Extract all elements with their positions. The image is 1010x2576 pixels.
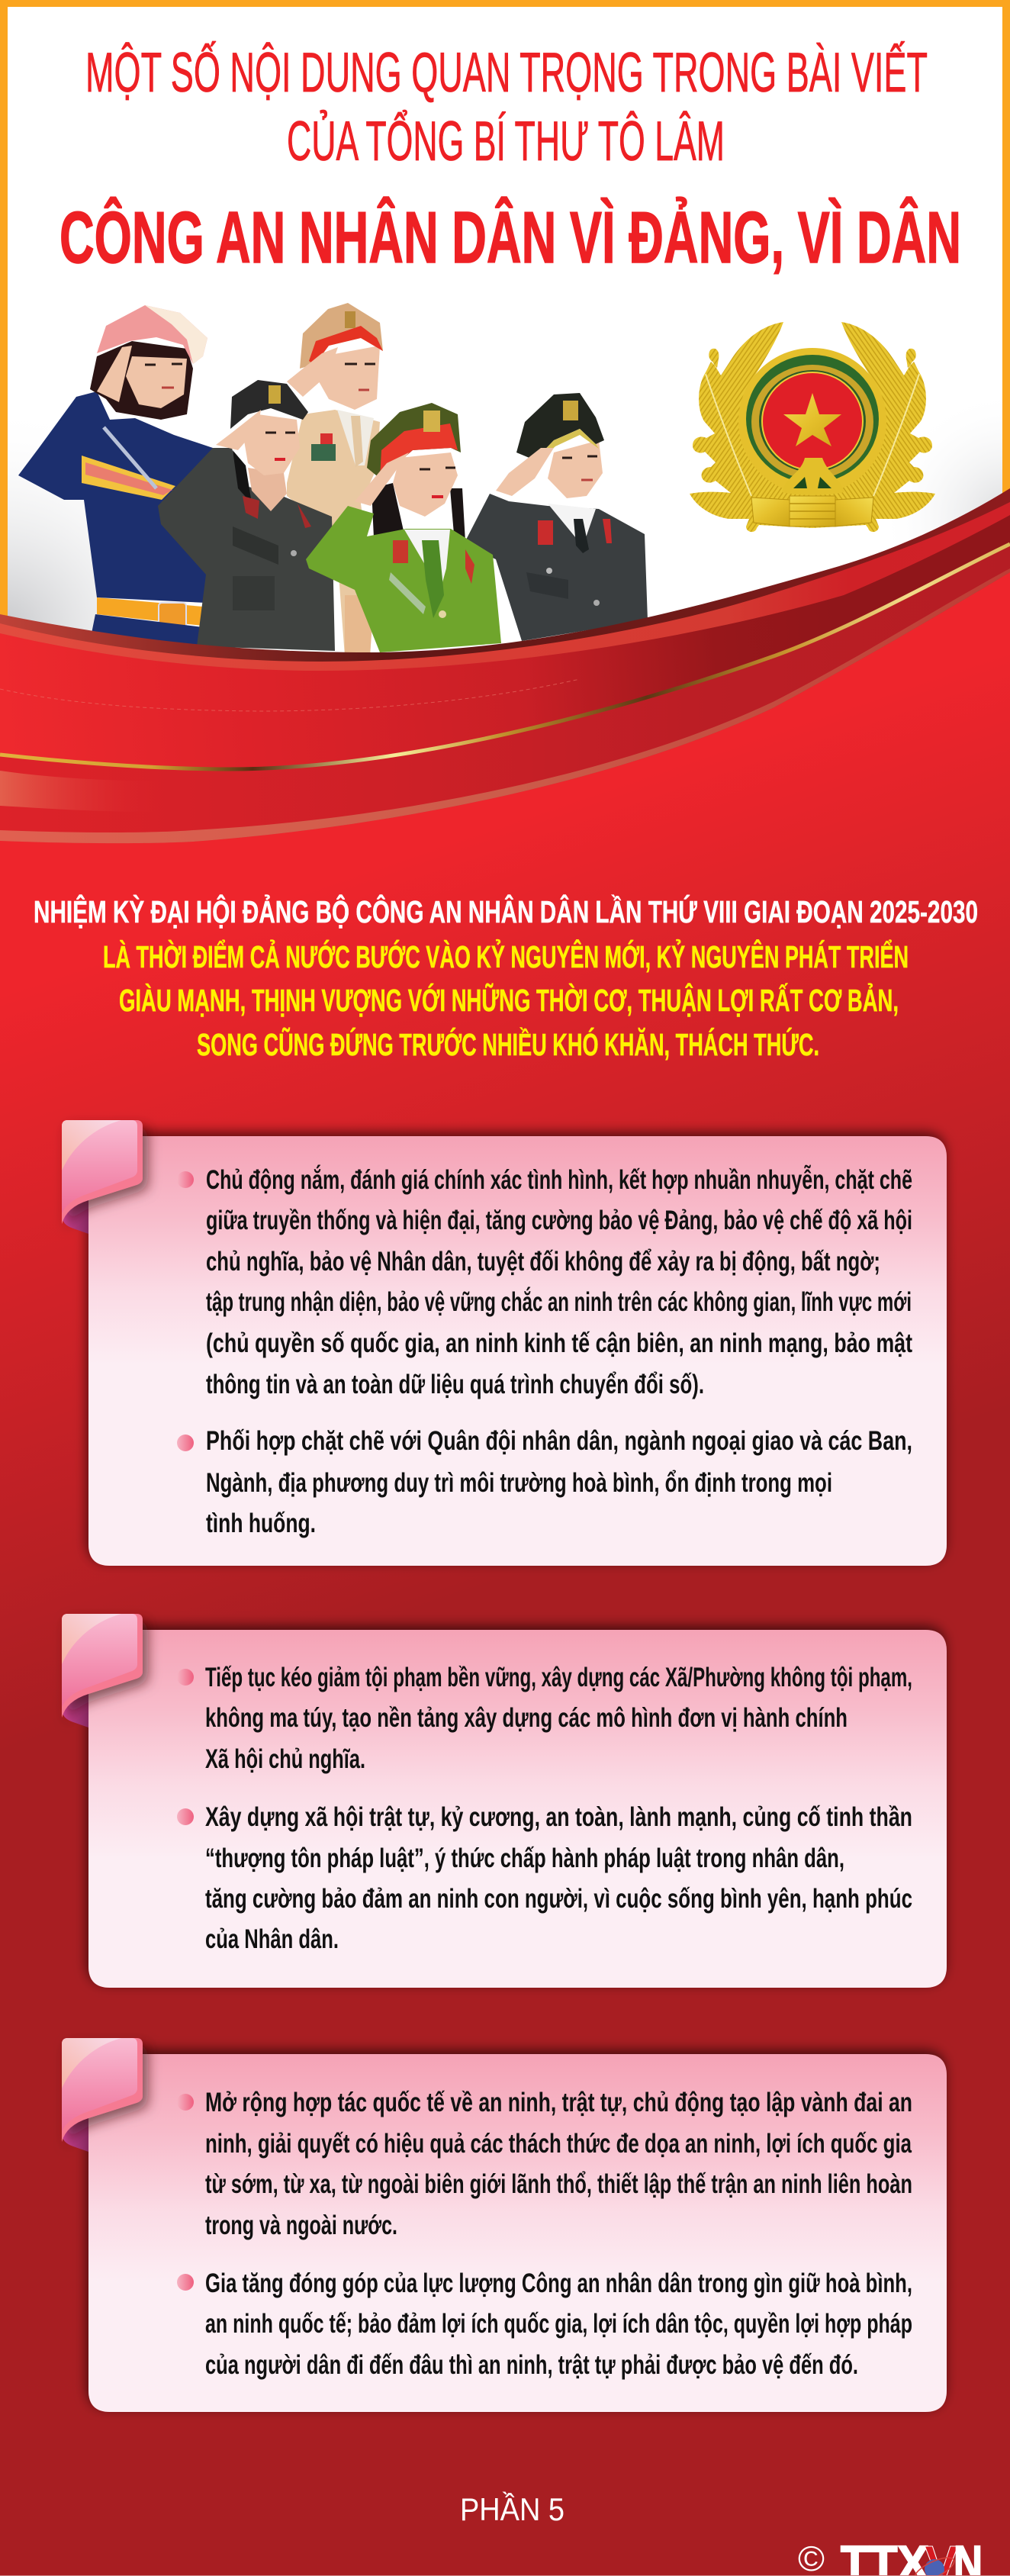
- panel 2 text one: [205, 1663, 912, 1774]
- panel 3 background: [88, 2054, 947, 2412]
- special police woman in dark uniform: [158, 380, 335, 651]
- panel 2: crime reduction: [62, 1614, 947, 1988]
- panel 1: proactive assessment: [62, 1120, 947, 1566]
- traffic police officer in beige: [287, 303, 383, 656]
- panel 1 bullet one: [177, 1171, 194, 1188]
- panel 3 text two: [205, 2268, 912, 2380]
- panel 1 text one: thông tin và an toàn dữ liệu quá trình chuyển đổi số).: [206, 1370, 704, 1399]
- police emblem: [690, 322, 935, 532]
- firefighter in navy uniform: [18, 305, 238, 656]
- panel 2 folded tab: [62, 1614, 143, 1728]
- panel 3 text one: trong và ngoài nước.: [205, 2211, 397, 2240]
- panel 1 text two: [206, 1426, 912, 1538]
- panel 3: international cooperation: [62, 2038, 947, 2412]
- panel 2 bullet one: [177, 1669, 194, 1686]
- header white area with orange border: [0, 0, 1010, 687]
- decorative red wave ribbons: [0, 488, 1010, 916]
- panel 1 bullet two: [177, 1435, 194, 1451]
- panel 1 background: [88, 1136, 947, 1566]
- panel 1 folded tab: [62, 1120, 143, 1234]
- part label: PHẦN 5: [460, 2491, 565, 2527]
- saluting police officers: [18, 303, 648, 656]
- panel 3 folded tab: [62, 2038, 143, 2152]
- people's police woman in green uniform: [306, 403, 501, 652]
- panel 2 text two: của Nhân dân.: [205, 1924, 339, 1954]
- panel 3 text one: [205, 2088, 912, 2240]
- panel 2 bullet two: [177, 1808, 194, 1825]
- panel 2 text one: Xã hội chủ nghĩa.: [205, 1744, 365, 1774]
- bottom edge line: [0, 2575, 1010, 2576]
- intro statement: [34, 894, 978, 1062]
- title: [60, 41, 961, 279]
- security officer in dark uniform: [464, 393, 648, 641]
- panel 1 text one: [206, 1164, 912, 1399]
- panel 3 bullet two: [177, 2274, 194, 2291]
- panel 3 bullet one: [177, 2094, 194, 2111]
- TTXVN logo: [798, 2536, 983, 2576]
- panel 2 background: [88, 1630, 947, 1988]
- panel 1 text two: tình huống.: [206, 1509, 316, 1538]
- title: CỦA TỔNG BÍ THƯ TÔ LÂM: [287, 111, 725, 172]
- panel 2 text two: [205, 1802, 912, 1954]
